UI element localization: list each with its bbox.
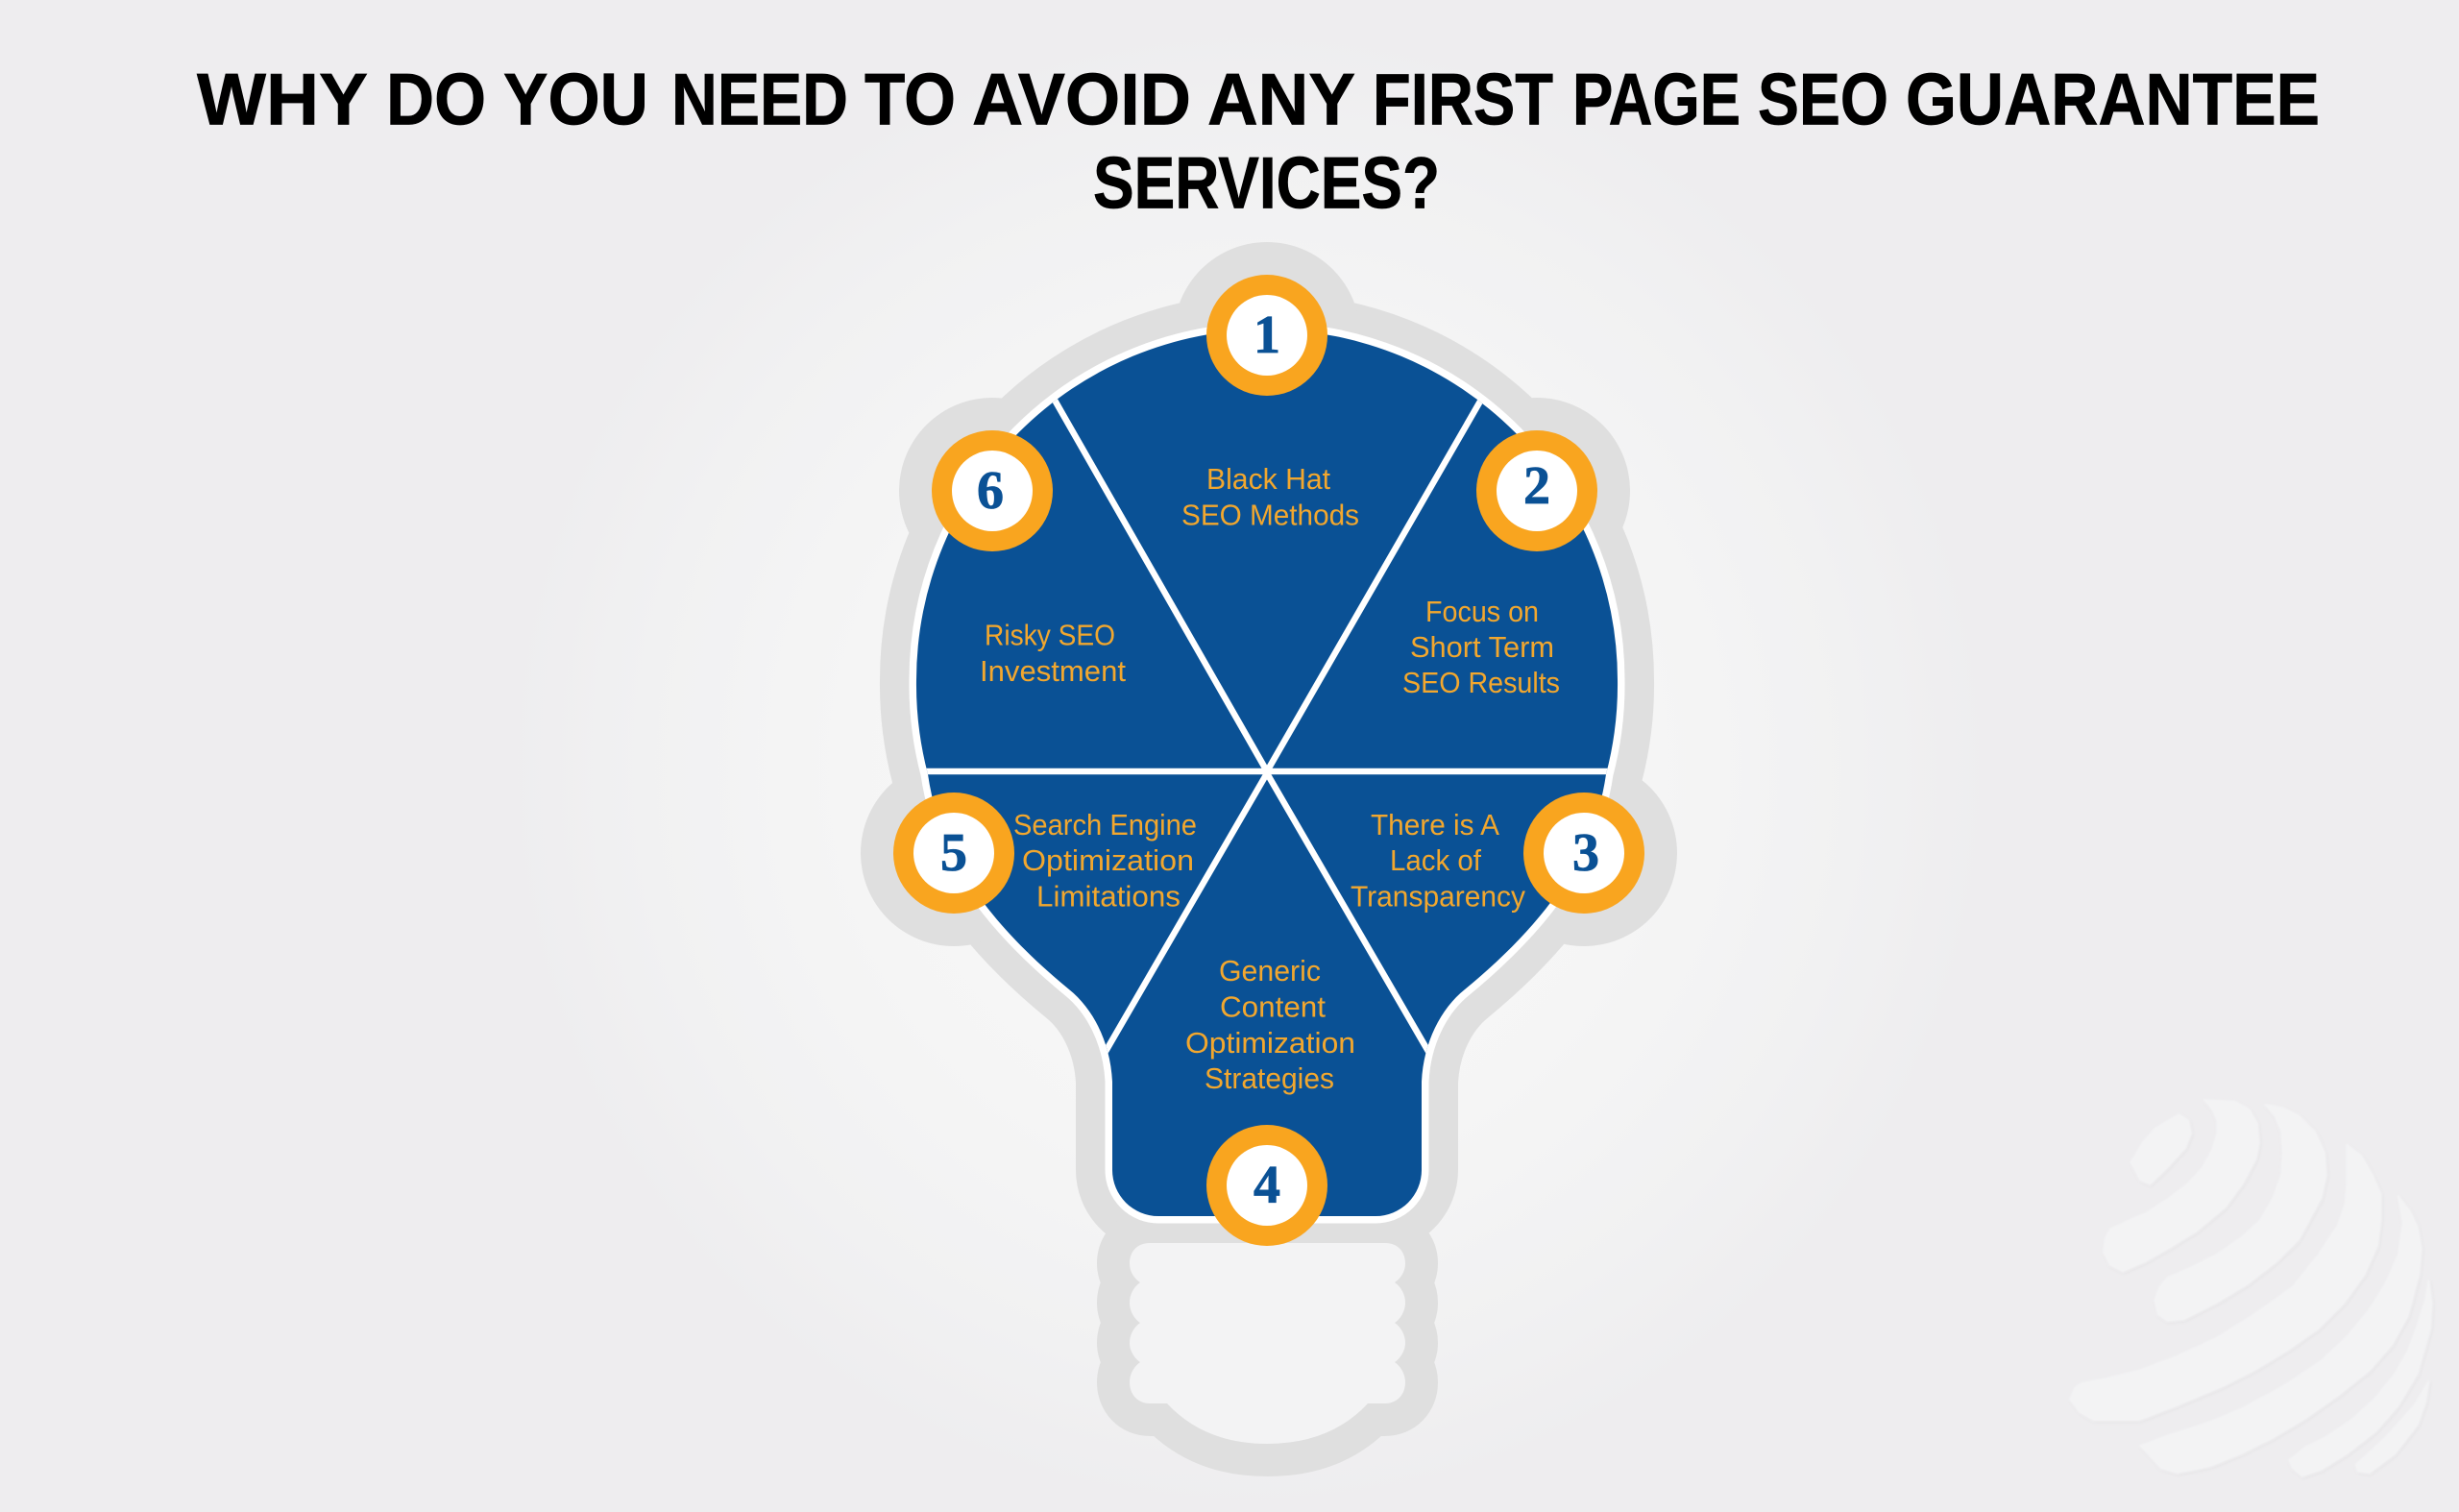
title: YOU [503, 60, 648, 140]
number badge 5 [893, 793, 1014, 914]
segment 4 label [1185, 954, 1355, 1095]
title: TO [864, 60, 956, 140]
globe watermark [2070, 1100, 2432, 1476]
number badge 2 [1476, 430, 1597, 551]
segment 5 label: Search Engine [1013, 808, 1197, 841]
title: GUARANTEE [1906, 60, 2320, 140]
segment 6 label [980, 619, 1126, 688]
segment 4 label: Optimization [1185, 1026, 1355, 1060]
number badge 6 [932, 430, 1053, 551]
segment 4 label: Strategies [1205, 1061, 1334, 1095]
title: SERVICES? [1093, 142, 1440, 225]
segment dividers [926, 399, 1608, 1054]
bulb blue body [916, 329, 1618, 1216]
title: AVOID [972, 60, 1191, 140]
title: SEO [1758, 60, 1888, 140]
segment 1 label [1181, 462, 1359, 532]
number badge 4 [1206, 1125, 1327, 1246]
bulb screw base [1130, 1243, 1405, 1444]
segment 5 label: Optimization [1022, 843, 1194, 877]
number badge 5: 5 [940, 823, 967, 883]
number badge 4: 4 [1254, 1156, 1280, 1215]
title: WHY [197, 60, 368, 140]
segment 2 label: Short Term [1410, 630, 1554, 664]
segment 2 label: Focus on [1425, 595, 1539, 628]
segment 6 label: Investment [980, 654, 1126, 688]
title: NEED [671, 60, 848, 140]
segment 3 label: Lack of [1390, 843, 1481, 877]
title: ANY [1207, 60, 1355, 140]
segment 2 label: SEO Results [1402, 666, 1560, 699]
segment 3 label: There is A [1371, 808, 1499, 841]
segment 5 label: Limitations [1036, 880, 1181, 913]
number badge 1 [1206, 275, 1327, 396]
segment 1 label: SEO Methods [1181, 498, 1359, 532]
segment 5 label [1013, 808, 1197, 913]
segment 2 label [1402, 595, 1560, 699]
title: FIRST [1373, 60, 1553, 140]
number badge 2: 2 [1523, 456, 1550, 516]
number badge 1: 1 [1254, 305, 1280, 365]
light bulb [861, 242, 1677, 1444]
title: DO [386, 60, 486, 140]
segment 6 label: Risky SEO [985, 619, 1115, 651]
segment 3 label [1351, 808, 1525, 913]
number badge 3 [1523, 793, 1644, 914]
title: PAGE [1572, 60, 1741, 140]
title [197, 60, 2320, 225]
segment 1 label: Black Hat [1206, 462, 1330, 496]
number badge 3: 3 [1572, 823, 1599, 883]
bulb halo [861, 242, 1677, 1444]
segment 4 label: Generic [1219, 954, 1321, 988]
number badge 6: 6 [977, 461, 1004, 521]
segment 4 label: Content [1220, 989, 1326, 1024]
segment 3 label: Transparency [1351, 880, 1525, 913]
